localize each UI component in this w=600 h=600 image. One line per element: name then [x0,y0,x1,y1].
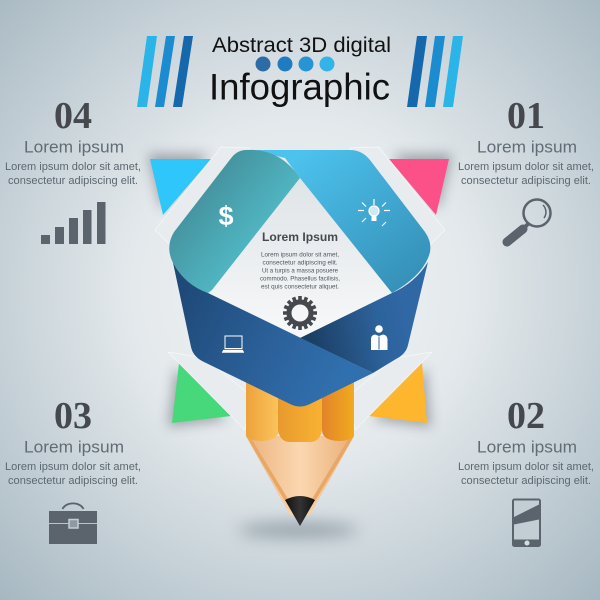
block 02 text: Lorem ipsum dolor sit amet, [458,461,594,473]
text block: centre: Ut a turpis a massa posuere [262,268,338,274]
band: sky blue [250,150,430,293]
text block: centre: Lorem ipsum dolor sit amet, [261,252,339,258]
icon: magnifier [507,200,550,242]
block 04 text: 04 [54,95,92,137]
block 03 text [5,395,141,487]
block 01 text: consectetur adipiscing elit. [461,175,591,187]
band: navy right [300,262,428,373]
block 04 text: Lorem ipsum [24,138,124,156]
block 02 text: 02 [507,395,545,437]
block 03 text: Lorem ipsum [24,438,124,456]
block 03 text: consectetur adipiscing elit. [8,475,138,487]
triangle: blue [150,159,211,215]
band: navy left [172,258,373,406]
block 01 text: 01 [507,95,545,137]
hexagon main shape [169,150,430,406]
block 03 text: Lorem ipsum dolor sit amet, [5,461,141,473]
text block: centre: commodo. Phasellus facilisis, [260,276,340,282]
block 04 text [5,95,141,187]
block 01 text [458,95,594,187]
icon: gear [283,296,317,330]
block 04 text: Lorem ipsum dolor sit amet, [5,161,141,173]
block 04 text: consectetur adipiscing elit. [8,175,138,187]
triangle: green [172,363,231,423]
block 01 text: Lorem ipsum dolor sit amet, [458,161,594,173]
title line 1: Abstract 3D digital [212,34,391,57]
right title stripes [407,36,463,107]
block 02 text: consectetur adipiscing elit. [461,475,591,487]
fold shadow bottom right [373,367,431,427]
fold shadow top right [392,154,452,210]
icon: smartphone [512,498,541,547]
fold shadow top left [148,154,209,210]
heading: centre: Lorem Ipsum [262,232,338,244]
icon: light bulb [358,199,390,226]
title dots [256,56,334,72]
text block: centre [260,252,340,290]
text block: centre: est quis consectetur aliquet. [261,284,339,290]
title line 2: Infographic [209,66,390,108]
fold shadow bottom left [168,367,227,427]
block 02 text: Lorem ipsum [477,438,577,456]
panel: centre diamond [205,178,395,342]
block 01 text: Lorem ipsum [477,138,577,156]
icon: bar chart [41,202,106,244]
block 02 text [458,395,594,487]
icon: briefcase [49,503,97,544]
band: teal [169,150,300,293]
left title stripes [137,36,193,107]
icon: dollar: $ [218,201,234,231]
paper fold strips [155,147,445,430]
icon: laptop [222,336,244,352]
triangle: pink [389,159,449,215]
block 03 text: 03 [54,395,92,437]
triangle: yellow [369,363,427,423]
text block: centre: consectetur adipiscing elit. [262,260,338,266]
icon: businessman [371,325,388,350]
pencil shadow [238,522,358,538]
pencil [246,380,354,526]
